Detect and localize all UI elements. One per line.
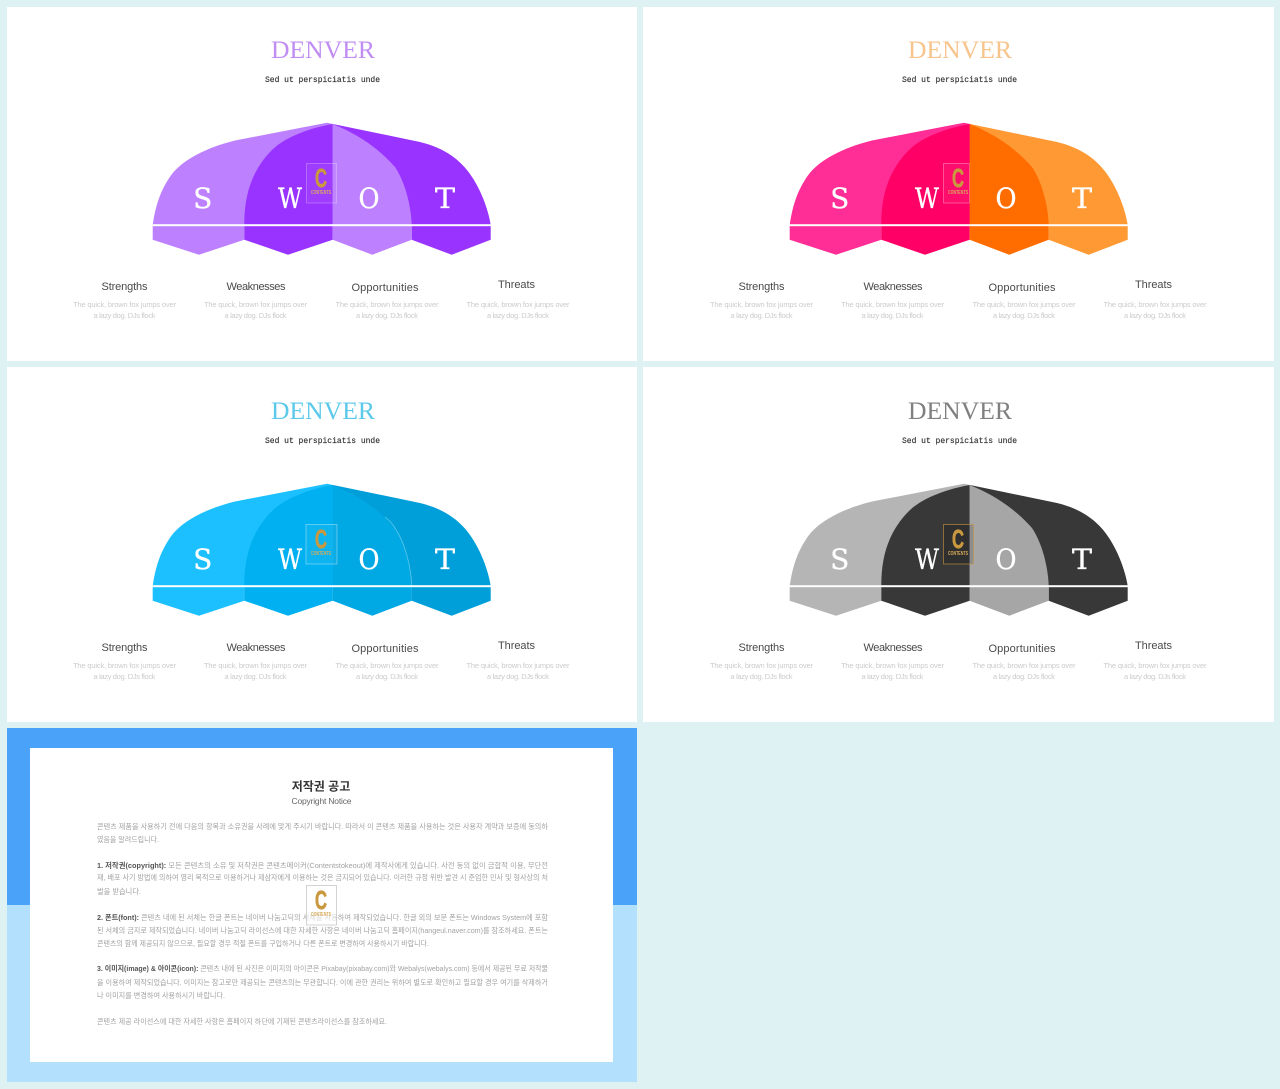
labels: The quick, brown fox jumps over (841, 300, 944, 309)
labels: Weaknesses (226, 281, 286, 293)
labels: The quick, brown fox jumps over (841, 661, 944, 670)
labels: The quick, brown fox jumps over (972, 300, 1076, 309)
panel: pink orange SWOT (643, 7, 1274, 361)
labels: a lazy dog. DJs flock (993, 672, 1055, 681)
segment: O: O (996, 543, 1016, 576)
notice body: 였음을 알려드립니다. (97, 835, 159, 844)
labels: Strengths (102, 281, 148, 293)
labels: Threats (498, 640, 536, 652)
segment: T (333, 485, 491, 616)
logo watermark: C (952, 524, 964, 554)
panel: copyright notice (7, 728, 637, 1082)
notice body: 재, 배포 사기 방법에 의하여 영리 목적으로 이용하거나 제삼자에게 이용하는 것은 금지되어 있습니다. 이러한 규정 위반 발견 시 준엄한 민사 및 형사상의 처 (97, 873, 548, 882)
segment: O: O (996, 182, 1016, 215)
notice body: 나 이미지를 변경하여 사용하시기 바랍니다. (97, 991, 225, 1000)
segment: S (790, 123, 970, 255)
segment: T (970, 124, 1128, 255)
labels: Threats (1135, 279, 1172, 291)
panel: purple SWOT (7, 7, 637, 361)
notice body: 2. 폰트(font): 콘텐츠 내에 된 서체는 한글 폰트는 네이버 나눔고딕의 서체를 사용하여 제작되었습니다. 한글 외의 보문 폰트는 Windows System에 포함 (97, 913, 548, 922)
logo watermark: CONTENTS (311, 190, 331, 196)
notice body (97, 822, 548, 1026)
labels: The quick, brown fox jumps over (710, 300, 814, 309)
labels: Opportunities (988, 643, 1056, 655)
segment: W: W (278, 543, 302, 576)
labels: The quick, brown fox jumps over (1104, 300, 1207, 309)
labels: Opportunities (352, 282, 419, 294)
logo watermark: C (315, 885, 327, 915)
labels: a lazy dog. DJs flock (862, 311, 924, 320)
labels (710, 640, 1207, 681)
labels: a lazy dog. DJs flock (730, 311, 793, 320)
segment: S: S (193, 182, 212, 215)
labels: a lazy dog. DJs flock (94, 672, 156, 681)
logo watermark: CONTENTS (948, 190, 968, 196)
labels: The quick, brown fox jumps over (336, 300, 439, 309)
segment: S: S (193, 543, 212, 576)
segment: W (244, 124, 333, 255)
notice body: 1. 저작권(copyright): 모든 콘텐츠의 소유 및 저작권은 콘텐츠메이커(Contentstokeout)에 제작사에게 있습니다. 사전 동의 없이 금합적 이용, 무단전 (97, 861, 548, 870)
labels: a lazy dog. DJs flock (1124, 672, 1186, 681)
labels: The quick, brown fox jumps over (73, 661, 176, 670)
labels: The quick, brown fox jumps over (972, 661, 1076, 670)
notice body: 콘텐츠의 함께 제공되지 않으므로, 필요할 경우 적절 폰트를 구입하거나 다른 폰트로 변경하여 사용하시기 바랍니다. (97, 939, 429, 948)
labels: Threats (1135, 640, 1172, 652)
notice body: 3. 이미지(image) & 아이콘(icon): 콘텐츠 내에 된 사진은 이미지의 아이콘은 Pixabay(pixabay.com)와 Webalys(webalys.com) 등에서 제공된 무료 저작물 (97, 964, 548, 973)
logo watermark (944, 163, 970, 203)
logo watermark (306, 163, 336, 203)
segment: W (244, 485, 333, 616)
labels: Strengths (738, 281, 785, 293)
title: DENVER gray: DENVER (908, 396, 1012, 425)
labels: The quick, brown fox jumps over (466, 661, 570, 670)
title: DENVER blue: DENVER (271, 396, 375, 425)
labels: Weaknesses (864, 642, 923, 654)
subtitle: Sed ut perspiciatis unde (265, 437, 380, 446)
labels: The quick, brown fox jumps over (710, 661, 814, 670)
segment: S: S (830, 543, 849, 576)
segment: S (153, 484, 333, 616)
segment: T: T (1072, 182, 1092, 215)
labels: Weaknesses (864, 281, 923, 293)
title: DENVER purple: DENVER (271, 35, 375, 64)
logo watermark: CONTENTS (311, 912, 331, 918)
subtitle: Sed ut perspiciatis unde (902, 76, 1017, 85)
segment: T: T (435, 543, 455, 576)
logo watermark: CONTENTS (311, 551, 331, 557)
segment: S (790, 484, 970, 616)
labels: The quick, brown fox jumps over (336, 661, 439, 670)
labels: The quick, brown fox jumps over (204, 661, 308, 670)
labels: a lazy dog. DJs flock (730, 672, 793, 681)
labels: a lazy dog. DJs flock (356, 672, 418, 681)
labels: The quick, brown fox jumps over (73, 300, 176, 309)
logo watermark (306, 524, 337, 564)
labels: Threats (498, 279, 536, 291)
labels: Strengths (738, 642, 785, 654)
labels: a lazy dog. DJs flock (224, 311, 287, 320)
labels: a lazy dog. DJs flock (94, 311, 156, 320)
segment: S: S (830, 182, 849, 215)
labels: The quick, brown fox jumps over (204, 300, 308, 309)
labels (73, 279, 570, 320)
segment: O: O (358, 543, 380, 576)
segment: W: W (278, 182, 302, 215)
segment: O (333, 485, 412, 616)
segment: O (970, 124, 1049, 255)
panel: blue SWOT (7, 367, 637, 722)
notice body: 콘텐츠 제공 라이선스에 대한 자세한 사항은 홈페이지 하단에 기재된 콘텐츠라이선스를 참조하세요. (97, 1017, 387, 1026)
logo watermark (944, 524, 974, 564)
segment: T: T (1072, 543, 1092, 576)
logo watermark: C (315, 163, 327, 193)
labels (73, 640, 570, 681)
segment: T (970, 485, 1128, 616)
labels: a lazy dog. DJs flock (862, 672, 924, 681)
labels: Strengths (102, 642, 148, 654)
logo watermark (306, 885, 336, 925)
segment: O (970, 485, 1049, 616)
segment: T: T (435, 182, 455, 215)
notice body: 콘텐츠 제품을 사용하기 전에 다음의 항목과 소유권을 사례에 맞게 주시기 바랍니다. 따라서 이 콘텐츠 제품을 사용하는 것은 사용자 계약과 보증에 동의하 (97, 822, 548, 831)
labels: The quick, brown fox jumps over (1104, 661, 1207, 670)
subtitle: Sed ut perspiciatis unde (265, 76, 380, 85)
labels: a lazy dog. DJs flock (487, 672, 549, 681)
logo watermark: CONTENTS (948, 551, 968, 557)
notice body: 된 서체의 금지로 제작되었습니다. 네이버 나눔고딕 라이선스에 대한 자세한 사항은 네이버 나눔고딕 홈페이지(hangeul.naver.com)를 참조하세요. 폰트는 (97, 926, 548, 935)
segment: O: O (358, 182, 380, 215)
segment: W: W (915, 182, 939, 215)
panel: gray SWOT (643, 367, 1274, 722)
logo watermark: C (315, 524, 327, 554)
labels: Opportunities (352, 643, 419, 655)
labels: a lazy dog. DJs flock (224, 672, 287, 681)
title: DENVER orange: DENVER (908, 35, 1012, 64)
labels: Weaknesses (226, 642, 286, 654)
subtitle: Sed ut perspiciatis unde (902, 437, 1017, 446)
segment: O (333, 124, 412, 255)
segment: W (881, 124, 970, 255)
labels: a lazy dog. DJs flock (356, 311, 418, 320)
segment: S (153, 123, 333, 255)
labels: a lazy dog. DJs flock (993, 311, 1055, 320)
notice title: 저작권 공고 (292, 778, 350, 794)
segment: W: W (915, 543, 939, 576)
labels: a lazy dog. DJs flock (487, 311, 549, 320)
notice subtitle: Copyright Notice (292, 796, 352, 806)
logo watermark: C (952, 163, 964, 193)
notice body: 을 이용하여 제작되었습니다. 이미지는 참고로만 제공되는 콘텐츠의는 무관합니다. 이에 관한 권리는 위하여 별도로 확인하고 필요할 경우 여기를 삭제하거 (97, 978, 548, 987)
notice body: 벌을 받습니다. (97, 887, 141, 896)
labels: Opportunities (988, 282, 1056, 294)
segment: T (333, 124, 491, 255)
labels: a lazy dog. DJs flock (1124, 311, 1186, 320)
labels: The quick, brown fox jumps over (466, 300, 570, 309)
segment: W (881, 485, 970, 616)
labels (710, 279, 1207, 320)
